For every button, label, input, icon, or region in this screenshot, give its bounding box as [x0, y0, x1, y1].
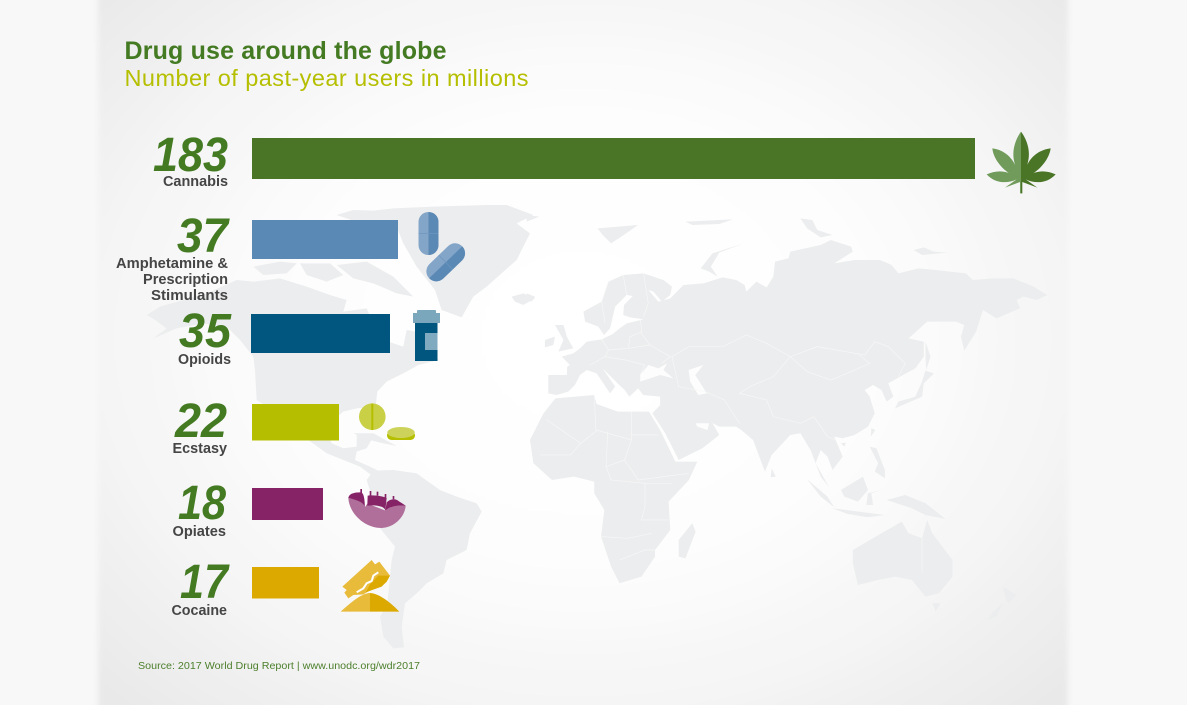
label: Ecstasy: [172, 441, 227, 457]
seas and map borders: [540, 273, 922, 572]
icon: capsules: [418, 212, 469, 285]
world map: [147, 205, 1047, 648]
bar: [251, 314, 390, 353]
label: Prescription: [143, 272, 228, 288]
label: [116, 256, 229, 304]
label: Stimulants: [151, 288, 228, 304]
icon: ecstasy tablets: [359, 403, 415, 440]
bar: [252, 220, 398, 259]
label: Cannabis: [163, 174, 228, 190]
label: Opioids: [178, 352, 231, 368]
icon: razor blade and powder pile: [341, 560, 399, 612]
icon: poppy pod: [348, 489, 406, 528]
value: 22: [174, 395, 227, 448]
value: 183: [153, 129, 228, 182]
map: South America: [367, 470, 482, 648]
row: opiates: [172, 477, 406, 540]
row: amphetamine and prescription stimulants: [116, 210, 469, 304]
row: cocaine: [172, 556, 399, 619]
label: Amphetamine &: [116, 256, 229, 272]
bar: [252, 404, 339, 440]
subtitle: Number of past-year users in millions: [124, 65, 528, 91]
label: Opiates: [172, 524, 226, 540]
source note: Source: 2017 World Drug Report | www.unodc.org/wdr2017: [138, 660, 420, 672]
value: 17: [180, 556, 230, 609]
bar: [252, 488, 323, 520]
heading: Drug use around the globe: [124, 37, 447, 65]
bar: [252, 567, 319, 598]
value: 35: [179, 305, 232, 358]
icon: pill bottle: [413, 310, 440, 361]
value: 18: [178, 477, 226, 530]
row: opioids: [178, 305, 440, 368]
map: Eurasia, Africa and Oceania: [527, 215, 1047, 620]
label: Cocaine: [172, 603, 227, 619]
bar: [252, 138, 975, 179]
title: [124, 37, 528, 91]
row: cannabis: [153, 129, 1056, 193]
map: Americas north: [147, 205, 535, 477]
row: ecstasy: [172, 395, 415, 457]
value: 37: [177, 210, 230, 263]
icon: cannabis leaf: [987, 132, 1056, 193]
